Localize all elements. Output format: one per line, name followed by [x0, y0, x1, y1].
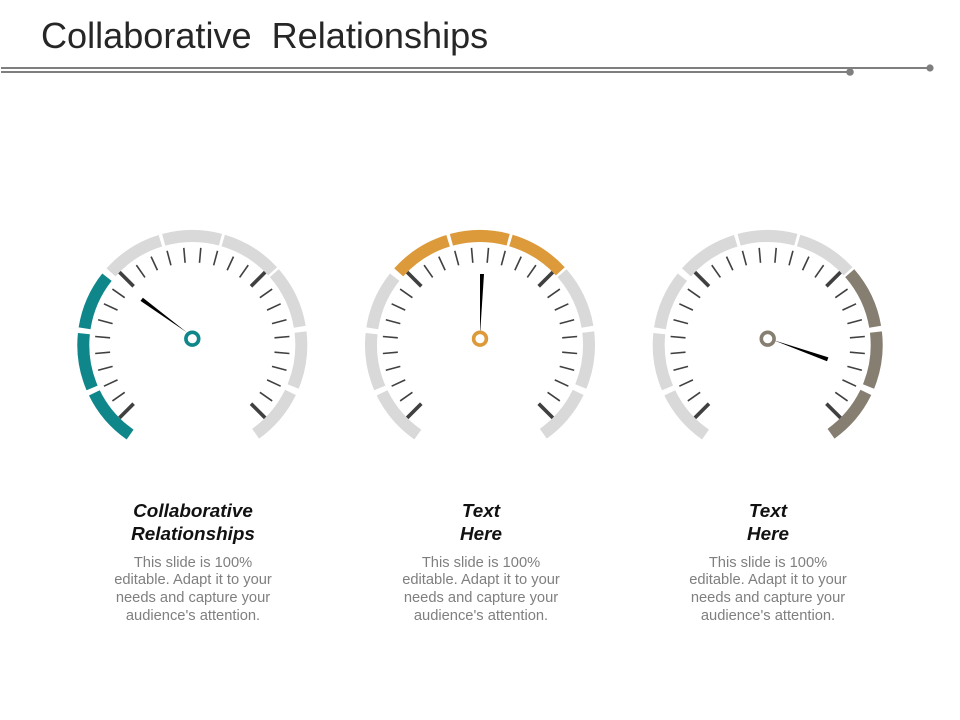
- description: editable. Adapt it to your: [114, 572, 272, 588]
- heading: Text: [749, 501, 787, 522]
- gauge: text here (right): [614, 191, 922, 499]
- hub: [761, 332, 774, 345]
- gauge: text here (centre): [326, 191, 634, 499]
- header rule lines: [1, 64, 934, 76]
- description: audience's attention.: [414, 608, 548, 624]
- heading: [460, 501, 502, 545]
- needle: [140, 298, 187, 332]
- text block: right: [689, 501, 847, 624]
- gauge: collaborative relationships: [38, 191, 346, 499]
- description: needs and capture your: [116, 590, 270, 606]
- needle: [773, 340, 828, 361]
- description: [114, 554, 272, 624]
- heading: [747, 501, 789, 545]
- text block: centre: [402, 501, 560, 624]
- text block: collaborative relationships: [114, 501, 272, 624]
- heading: Text: [462, 501, 500, 522]
- needle: [480, 274, 484, 335]
- heading: Relationships: [131, 524, 255, 545]
- description: needs and capture your: [404, 590, 558, 606]
- heading: Here: [460, 524, 502, 545]
- description: audience's attention.: [126, 608, 260, 624]
- description: editable. Adapt it to your: [689, 572, 847, 588]
- title: Collaborative Relationships: [41, 15, 488, 56]
- hub: [474, 332, 486, 345]
- description: This slide is 100%: [422, 554, 540, 570]
- description: editable. Adapt it to your: [402, 572, 560, 588]
- description: [402, 554, 560, 624]
- hub: [186, 332, 199, 345]
- heading: Collaborative: [133, 501, 253, 522]
- description: This slide is 100%: [709, 554, 827, 570]
- description: needs and capture your: [691, 590, 845, 606]
- description: audience's attention.: [701, 608, 835, 624]
- heading: Here: [747, 524, 789, 545]
- heading: [131, 501, 255, 545]
- description: This slide is 100%: [134, 554, 252, 570]
- description: [689, 554, 847, 624]
